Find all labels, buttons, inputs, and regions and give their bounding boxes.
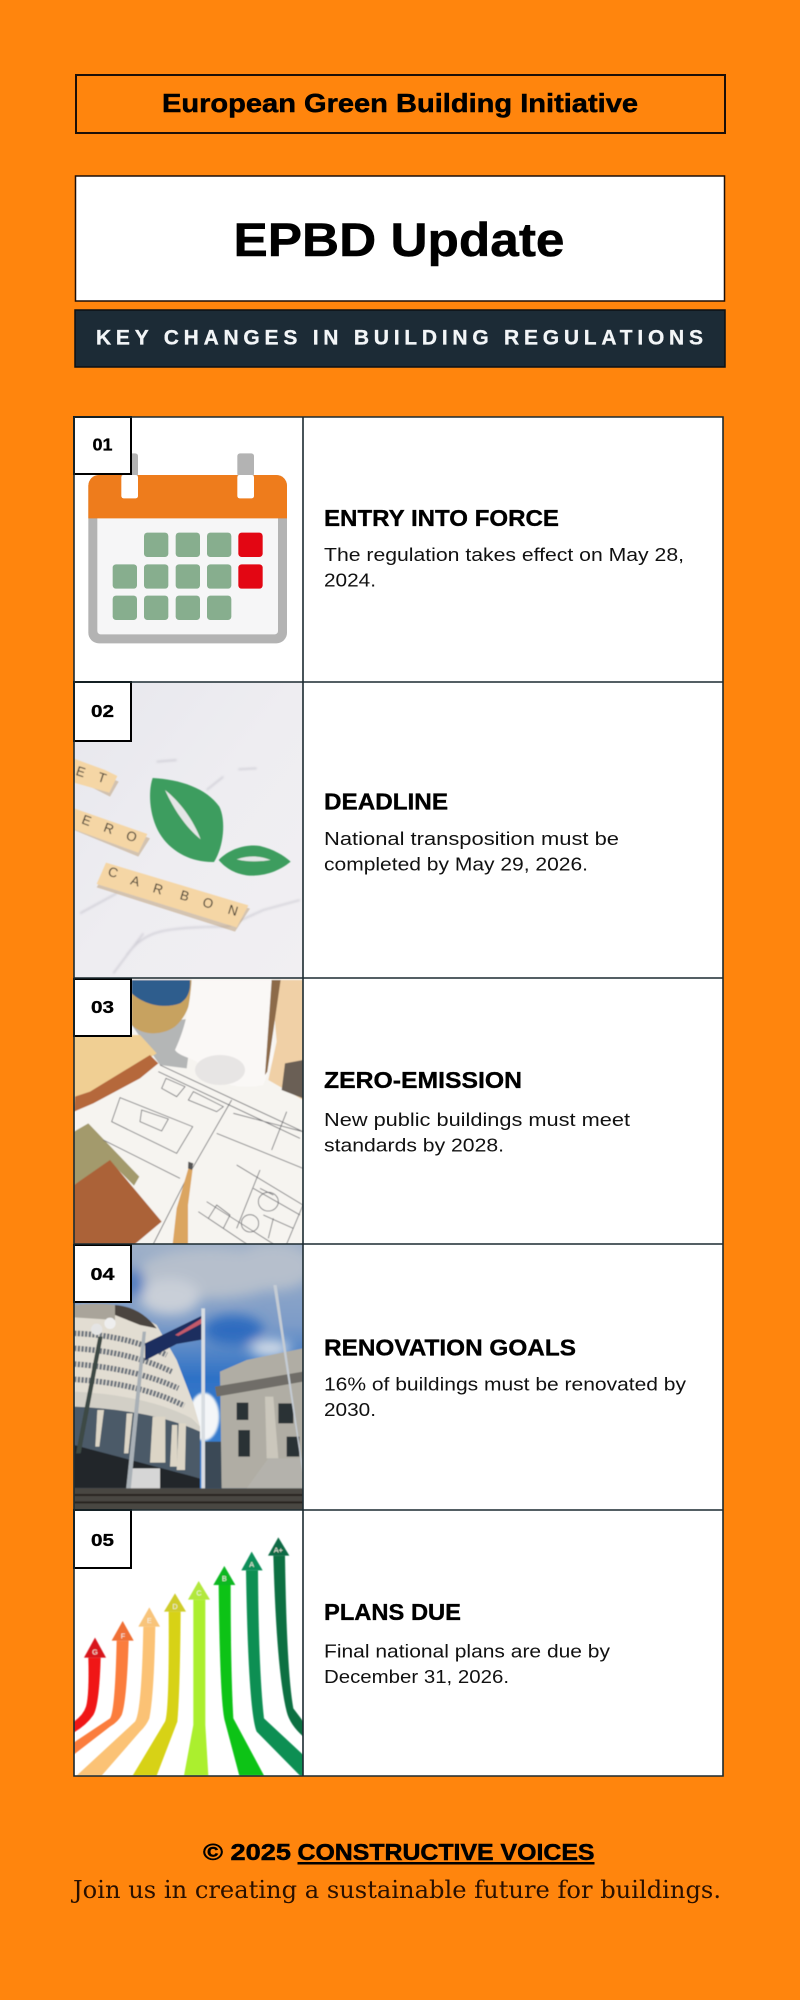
image: energy rating arrows: A+ — [274, 1545, 283, 1554]
tiles: R — [151, 880, 165, 898]
number badge 03: 03 — [91, 997, 114, 1017]
image: energy rating arrows: F — [121, 1632, 126, 1641]
tiles: A — [129, 873, 142, 890]
tiles: E — [74, 763, 87, 780]
header: organisation name: European Green Building Initiative — [162, 88, 638, 118]
leaves — [150, 778, 223, 862]
image: energy rating arrows: G — [92, 1648, 98, 1657]
description: December 31, 2026. — [324, 1667, 509, 1687]
row 04: renovation goals — [74, 1243, 723, 1510]
description — [324, 545, 684, 590]
number badge 01: 01 — [92, 434, 113, 454]
heading: PLANS DUE — [324, 1599, 461, 1625]
tiles: R — [102, 820, 116, 837]
header: organisation name — [76, 75, 725, 133]
title panel: EPBD Update — [234, 213, 564, 266]
photo: parliament buildings and flag — [74, 1244, 302, 1510]
number badge 05 — [74, 1510, 131, 1568]
number badge 02 — [74, 682, 131, 741]
tiles: O — [124, 828, 139, 845]
image: energy rating arrows: A — [249, 1560, 254, 1569]
photo: zero carbon tiles and leaves — [74, 682, 302, 978]
image: energy rating arrows: D — [172, 1602, 178, 1611]
description: National transposition must be — [324, 829, 619, 849]
description: 2030. — [324, 1400, 376, 1420]
number badge 02: 02 — [91, 701, 114, 721]
description: 2024. — [324, 570, 376, 590]
tiles — [74, 759, 291, 932]
footer: copyright: © 2025 — [203, 1839, 291, 1865]
number badge 01 — [74, 417, 131, 474]
heading: DEADLINE — [324, 788, 448, 814]
description: The regulation takes effect on May 28, — [324, 545, 684, 565]
photo: architectural plans — [74, 979, 302, 1244]
subtitle banner — [75, 310, 725, 367]
number badge 05: 05 — [91, 1530, 114, 1550]
row 03: zero-emission — [74, 978, 723, 1244]
row 05: plans due — [74, 1510, 723, 1776]
description: 16% of buildings must be renovated by — [324, 1374, 686, 1394]
description — [324, 1110, 630, 1156]
icon: calendar — [88, 453, 287, 644]
steps table — [74, 417, 723, 1776]
tiles: T — [96, 769, 108, 786]
tiles: C — [106, 864, 120, 881]
subtitle banner: KEY CHANGES IN BUILDING REGULATIONS — [96, 326, 703, 350]
tiles: E — [80, 812, 93, 829]
description: completed by May 29, 2026. — [324, 854, 588, 874]
heading: ZERO-EMISSION — [324, 1067, 522, 1093]
row 01: entry into force — [74, 417, 723, 682]
description — [324, 829, 619, 874]
number badge 03 — [74, 979, 131, 1036]
image: energy rating arrows — [74, 1537, 302, 1776]
image: energy rating arrows: C — [196, 1589, 202, 1598]
image: energy rating arrows: E — [147, 1616, 152, 1625]
row 02: deadline — [74, 682, 723, 978]
tiles: N — [226, 902, 240, 919]
description: Final national plans are due by — [324, 1642, 610, 1662]
number badge 04 — [74, 1245, 131, 1302]
heading: ENTRY INTO FORCE — [324, 505, 559, 531]
heading: RENOVATION GOALS — [324, 1334, 576, 1360]
image: energy rating arrows: B — [222, 1574, 227, 1583]
footer: tagline: Join us in creating a sustainable future for buildings. — [70, 1876, 721, 1904]
number badge 04: 04 — [90, 1264, 115, 1284]
tiles: O — [201, 894, 215, 912]
title panel — [76, 176, 724, 301]
footer: copyright: CONSTRUCTIVE VOICES — [298, 1839, 594, 1865]
description: standards by 2028. — [324, 1136, 504, 1156]
tiles: B — [178, 887, 191, 904]
description: New public buildings must meet — [324, 1110, 630, 1130]
description — [324, 1374, 686, 1420]
description — [324, 1642, 610, 1687]
